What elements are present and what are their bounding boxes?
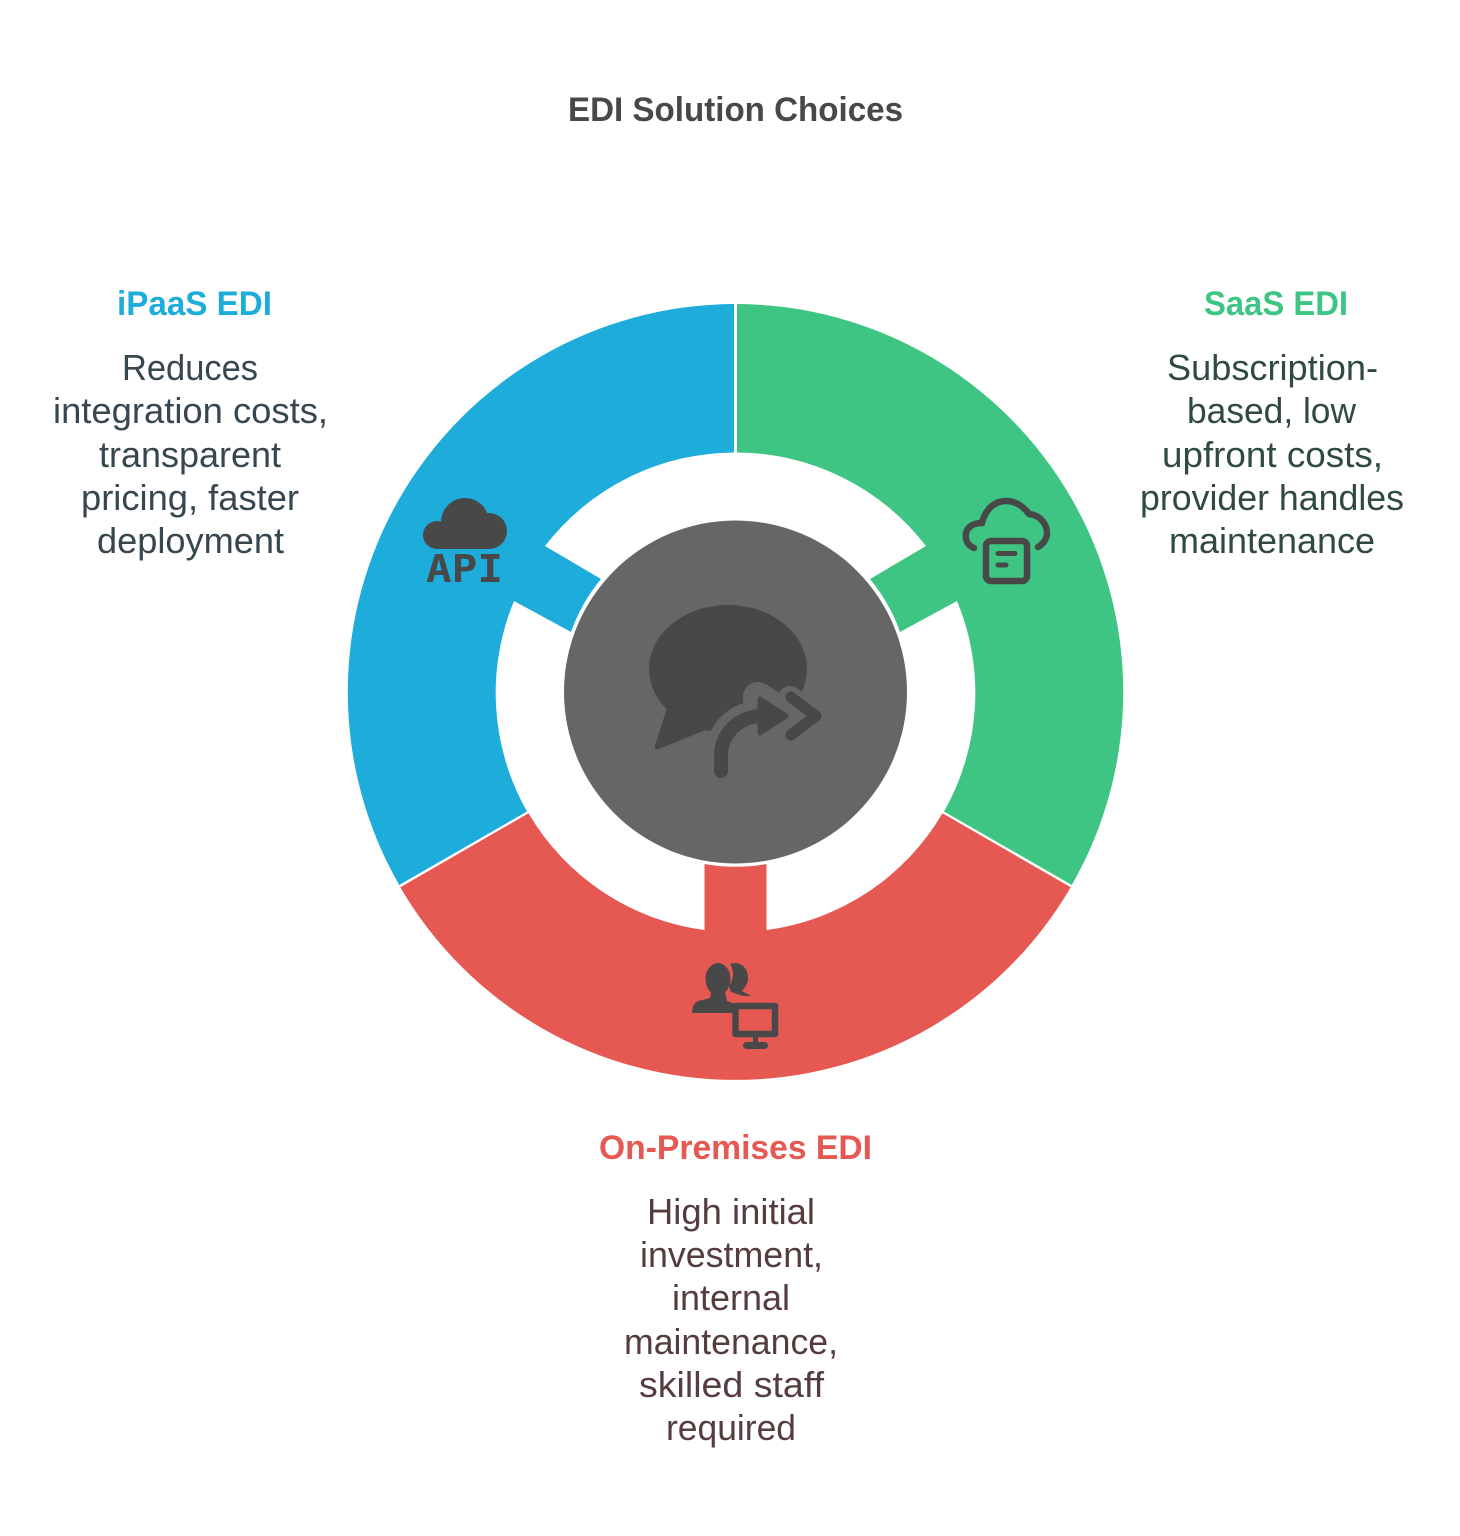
text block: On-Premises EDI description: skilled staff (639, 1364, 825, 1405)
text block: SaaS EDI description: upfront costs, (1162, 434, 1383, 475)
icon: cloud with document (966, 501, 1047, 581)
icon: API cloud (423, 498, 507, 591)
icon: users with monitor (692, 963, 775, 1049)
text block: On-Premises EDI description: required (666, 1407, 796, 1448)
center circle (564, 520, 907, 864)
text block: iPaaS EDI description: integration costs, (53, 390, 328, 431)
text block: SaaS EDI description: provider handles (1140, 477, 1404, 518)
text block: On-Premises EDI description: investment, (640, 1234, 823, 1275)
text block: iPaaS EDI description: transparent (99, 434, 281, 475)
text block: On-Premises EDI description (624, 1191, 838, 1448)
text block: iPaaS EDI description: deployment (97, 520, 284, 561)
icon: speech bubble with forward arrows (649, 605, 843, 771)
title: EDI Solution Choices (568, 91, 903, 129)
text block: On-Premises EDI description: maintenance, (624, 1321, 838, 1362)
text block: SaaS EDI description (1140, 347, 1404, 561)
icon: API cloud: API (426, 547, 503, 591)
text block: On-Premises EDI description: High initial (647, 1191, 815, 1232)
text block: iPaaS EDI description (53, 347, 328, 561)
segment: On-Premises EDI red (400, 813, 1071, 1080)
text block: On-Premises EDI description: internal (672, 1277, 790, 1318)
text block: iPaaS EDI description: Reduces (122, 347, 258, 388)
segment: iPaaS EDI blue (348, 304, 734, 885)
text block: SaaS EDI description: maintenance (1169, 520, 1375, 561)
segment: SaaS EDI green (737, 304, 1123, 885)
heading: On-Premises EDI: On-Premises EDI (599, 1129, 872, 1167)
heading: iPaaS EDI: iPaaS EDI (117, 285, 272, 323)
text block: iPaaS EDI description: pricing, faster (81, 477, 299, 518)
text block: SaaS EDI description: based, low (1187, 390, 1357, 431)
heading: SaaS EDI: SaaS EDI (1204, 285, 1348, 323)
text block: SaaS EDI description: Subscription- (1167, 347, 1378, 388)
